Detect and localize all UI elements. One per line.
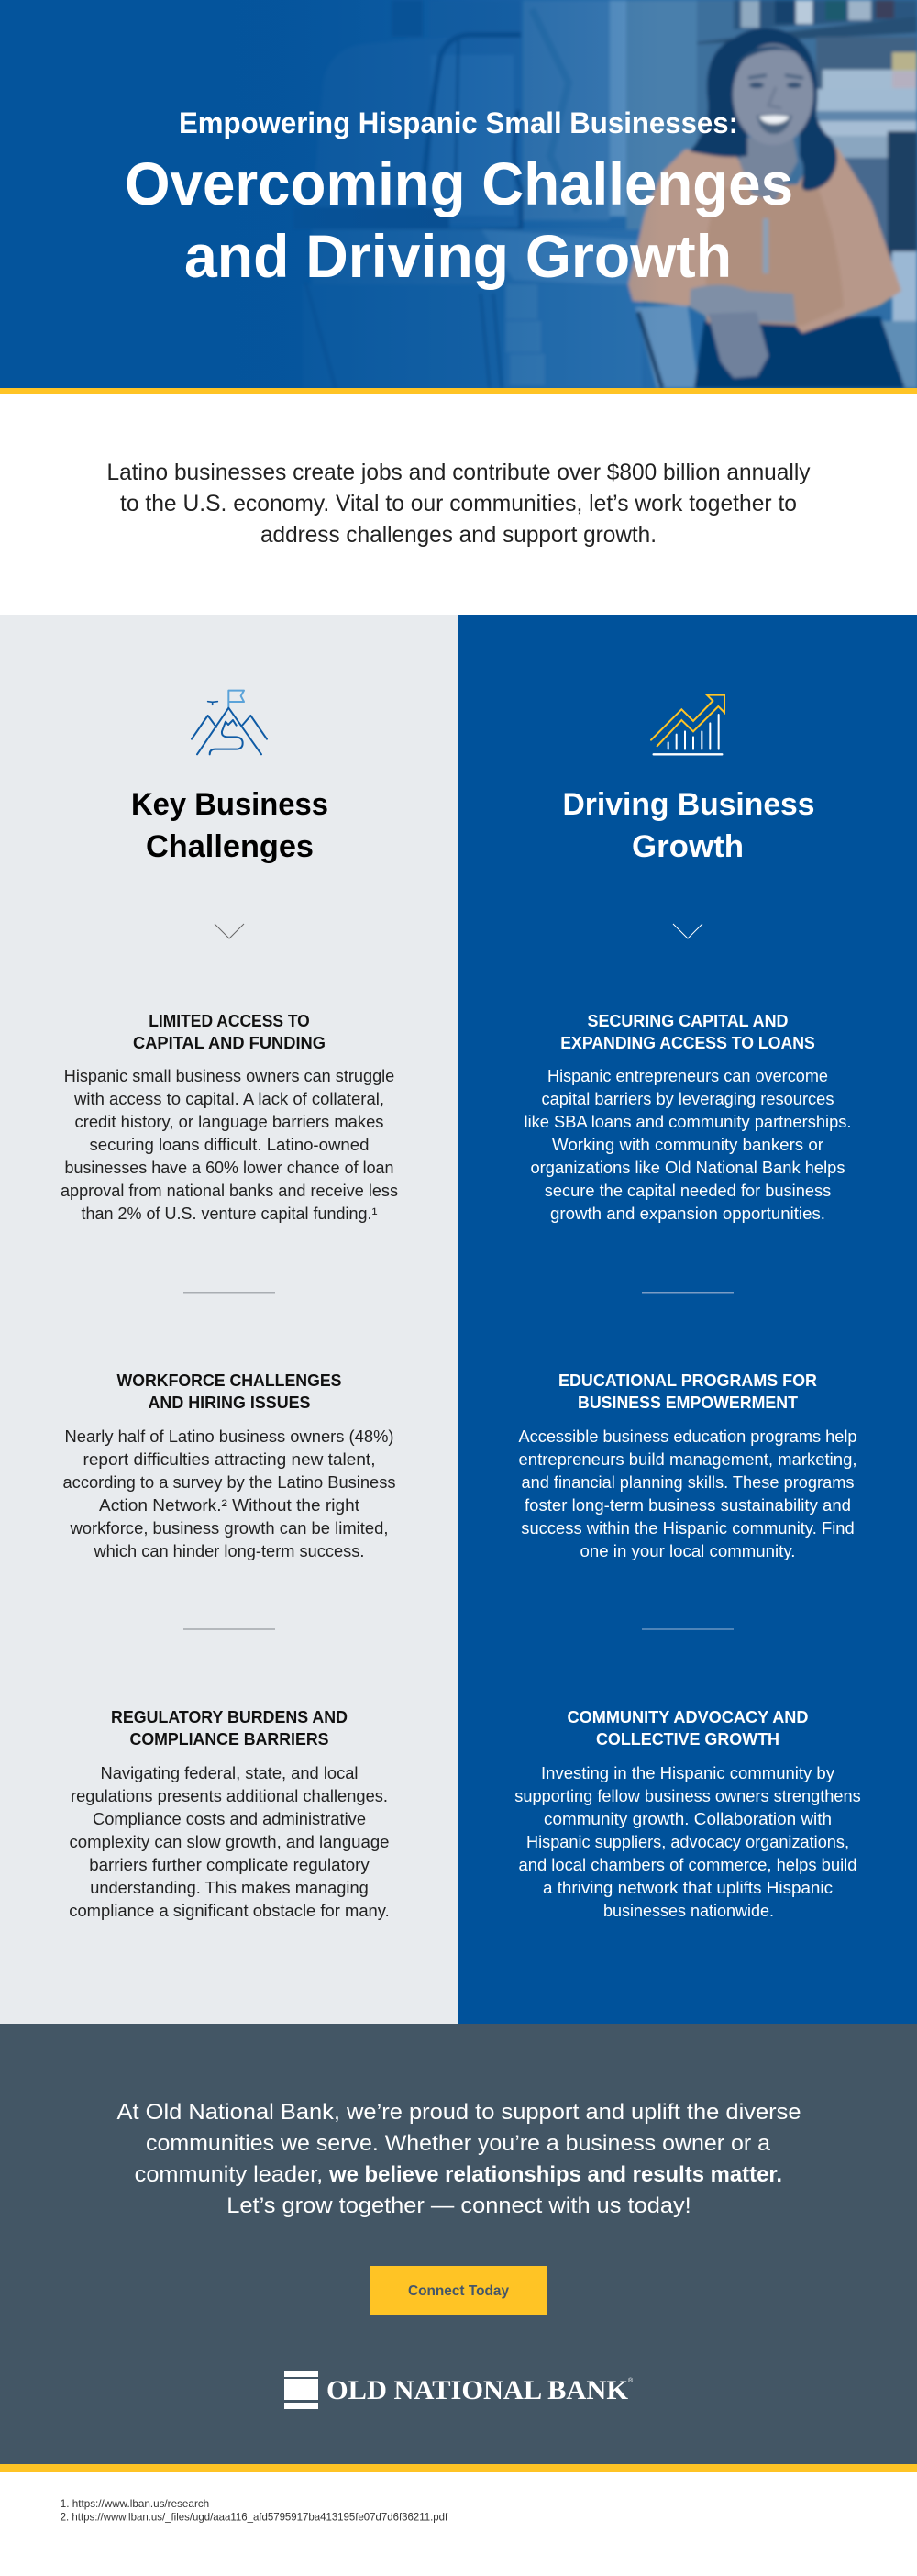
button: connect today <box>370 2266 547 2315</box>
panel: driving business growth <box>458 615 917 2024</box>
block: workforce challenges: Nearly half of Latino business owners (48%) <box>64 1427 394 1446</box>
block: limited access: CAPITAL AND FUNDING <box>133 1034 326 1052</box>
block: educational programs: and financial planning skills. These programs <box>521 1473 855 1492</box>
intro text <box>106 460 811 548</box>
block: community advocacy: Investing in the Hispanic community by <box>541 1764 834 1782</box>
icon: chevron <box>673 924 702 938</box>
hero photo: woman in a cafe <box>293 0 917 388</box>
block: securing capital: Working with community bankers or <box>552 1136 823 1154</box>
block: regulatory burdens: Compliance costs and administrative <box>93 1810 366 1828</box>
footnotes: 2. https://www.lban.us/_files/ugd/aaa116_afd5795917ba413195fe07d7d6f36211.pdf <box>61 2510 448 2523</box>
block: limited access: than 2% of U.S. venture capital funding.¹ <box>81 1205 378 1223</box>
icon: growth chart <box>651 695 724 754</box>
block: community advocacy: COMMUNITY ADVOCACY AND <box>567 1708 809 1727</box>
block: educational programs: success within the Hispanic community. Find <box>521 1519 855 1538</box>
heading: key business challenges <box>131 787 328 864</box>
button: connect today: Connect Today <box>408 2283 509 2299</box>
block: educational programs: EDUCATIONAL PROGRAMS FOR <box>558 1371 817 1390</box>
block: educational programs: entrepreneurs build management, marketing, <box>519 1450 856 1469</box>
closing statement: communities we serve. Whether you’re a business owner or a <box>146 2131 770 2156</box>
heading: driving business growth: Growth <box>632 829 744 864</box>
block: educational programs: BUSINESS EMPOWERMENT <box>578 1393 798 1412</box>
block: workforce challenges: AND HIRING ISSUES <box>149 1393 310 1412</box>
footnotes: 1. https://www.lban.us/research <box>61 2497 209 2510</box>
block: securing capital: capital barriers by leveraging resources <box>541 1090 834 1108</box>
block: regulatory burdens: regulations presents additional challenges. <box>71 1787 388 1805</box>
block: limited access: approval from national banks and receive less <box>61 1182 398 1200</box>
yellow rule above footnotes <box>0 2464 917 2472</box>
intro text: address challenges and support growth. <box>260 522 657 548</box>
block: community advocacy <box>514 1708 861 1920</box>
logo: old national bank <box>284 2371 634 2409</box>
block: limited access: businesses have a 60% lower chance of loan <box>64 1159 394 1177</box>
block: securing capital: EXPANDING ACCESS TO LOANS <box>560 1034 815 1052</box>
block: community advocacy: and local chambers of commerce, helps build <box>519 1856 856 1874</box>
panel: closing call to action <box>0 2024 917 2464</box>
display case <box>293 35 521 225</box>
block: community advocacy: businesses nationwide. <box>603 1902 774 1920</box>
logo: old national bank: OLD NATIONAL BANK <box>326 2375 629 2405</box>
block: community advocacy: supporting fellow business owners strengthens <box>514 1787 861 1805</box>
arm and hands <box>690 284 796 323</box>
logo: old national bank: ® <box>628 2377 634 2384</box>
block: securing capital: Hispanic entrepreneurs can overcome <box>547 1067 828 1085</box>
block: workforce challenges: report difficulties attracting new talent, <box>83 1450 376 1469</box>
block: regulatory burdens: compliance a significant obstacle for many. <box>69 1902 390 1920</box>
block: securing capital: organizations like Old National Bank helps <box>530 1159 845 1177</box>
block: securing capital: like SBA loans and community partnerships. <box>525 1113 851 1131</box>
block: limited access: LIMITED ACCESS TO <box>149 1012 310 1030</box>
block: regulatory burdens <box>69 1708 390 1920</box>
closing statement: we believe relationships and results matter. <box>328 2162 782 2187</box>
face <box>733 44 813 145</box>
block: educational programs: Accessible business education programs help <box>519 1427 856 1446</box>
block: securing capital: secure the capital needed for business <box>545 1182 831 1200</box>
block: community advocacy: community growth. Collaboration with <box>544 1810 832 1828</box>
block: securing capital: growth and expansion opportunities. <box>550 1205 825 1223</box>
block: regulatory burdens: complexity can slow growth, and language <box>70 1833 389 1851</box>
block: community advocacy: a thriving network that uplifts Hispanic <box>543 1879 833 1897</box>
block: workforce challenges: WORKFORCE CHALLENGES <box>117 1371 341 1390</box>
closing statement: community leader, <box>135 2162 323 2187</box>
block: securing capital: SECURING CAPITAL AND <box>587 1012 789 1030</box>
block: limited access: credit history, or language barriers makes <box>75 1113 383 1131</box>
title: and Driving Growth <box>184 222 732 290</box>
closing statement: At Old National Bank, we’re proud to support and uplift the diverse <box>117 2100 801 2125</box>
panel: key business challenges <box>0 615 458 2024</box>
yellow rule under hero <box>0 388 917 394</box>
block: limited access: securing loans difficult. Latino-owned <box>90 1136 369 1154</box>
block: community advocacy: COLLECTIVE GROWTH <box>596 1730 779 1749</box>
footnotes <box>61 2497 448 2523</box>
block: limited access <box>61 1012 398 1223</box>
block: workforce challenges <box>62 1371 396 1560</box>
intro text: Latino businesses create jobs and contribute over $800 billion annually <box>106 460 811 485</box>
hair <box>690 28 837 191</box>
shelves <box>734 0 917 29</box>
block: limited access: with access to capital. A lack of collateral, <box>73 1090 384 1108</box>
block: regulatory burdens: barriers further complicate regulatory <box>89 1856 370 1874</box>
hero banner <box>0 0 917 388</box>
heading: driving business growth: Driving Business <box>563 787 814 822</box>
block: limited access: Hispanic small business owners can struggle <box>64 1067 394 1085</box>
apron <box>694 316 905 388</box>
block: regulatory burdens: REGULATORY BURDENS AND <box>111 1708 348 1727</box>
heading: key business challenges: Key Business <box>131 787 328 822</box>
icon: mountain with flag <box>192 691 267 754</box>
block: regulatory burdens: COMPLIANCE BARRIERS <box>130 1730 328 1749</box>
heading: driving business growth <box>563 787 814 864</box>
block: securing capital <box>525 1012 851 1223</box>
block: community advocacy: Hispanic suppliers, advocacy organizations, <box>526 1833 849 1851</box>
left fade overlay <box>0 0 917 388</box>
block: workforce challenges: according to a survey by the Latino Business <box>62 1473 396 1492</box>
shirt <box>628 147 901 333</box>
block: educational programs: one in your local community. <box>580 1542 796 1560</box>
closing statement: Let’s grow together — connect with us today! <box>226 2193 691 2218</box>
neck <box>739 138 798 202</box>
closing statement <box>117 2100 801 2218</box>
counter and floor <box>312 229 642 284</box>
block: workforce challenges: workforce, business growth can be limited, <box>69 1519 388 1538</box>
chair <box>635 305 699 388</box>
block: regulatory burdens: understanding. This makes managing <box>90 1879 369 1897</box>
block: regulatory burdens: Navigating federal, state, and local <box>101 1764 358 1782</box>
heading: key business challenges: Challenges <box>146 829 314 864</box>
intro text: to the U.S. economy. Vital to our communities, let’s work together to <box>120 491 797 516</box>
title <box>125 150 793 290</box>
subtitle: Empowering Hispanic Small Businesses: <box>179 106 738 139</box>
icon: chevron <box>215 924 244 938</box>
block: workforce challenges: which can hinder long-term success. <box>93 1542 364 1560</box>
title: Overcoming Challenges <box>125 150 793 217</box>
block: educational programs: foster long-term business sustainability and <box>525 1496 851 1515</box>
block: educational programs <box>519 1371 856 1560</box>
block: workforce challenges: Action Network.² Without the right <box>99 1496 359 1515</box>
